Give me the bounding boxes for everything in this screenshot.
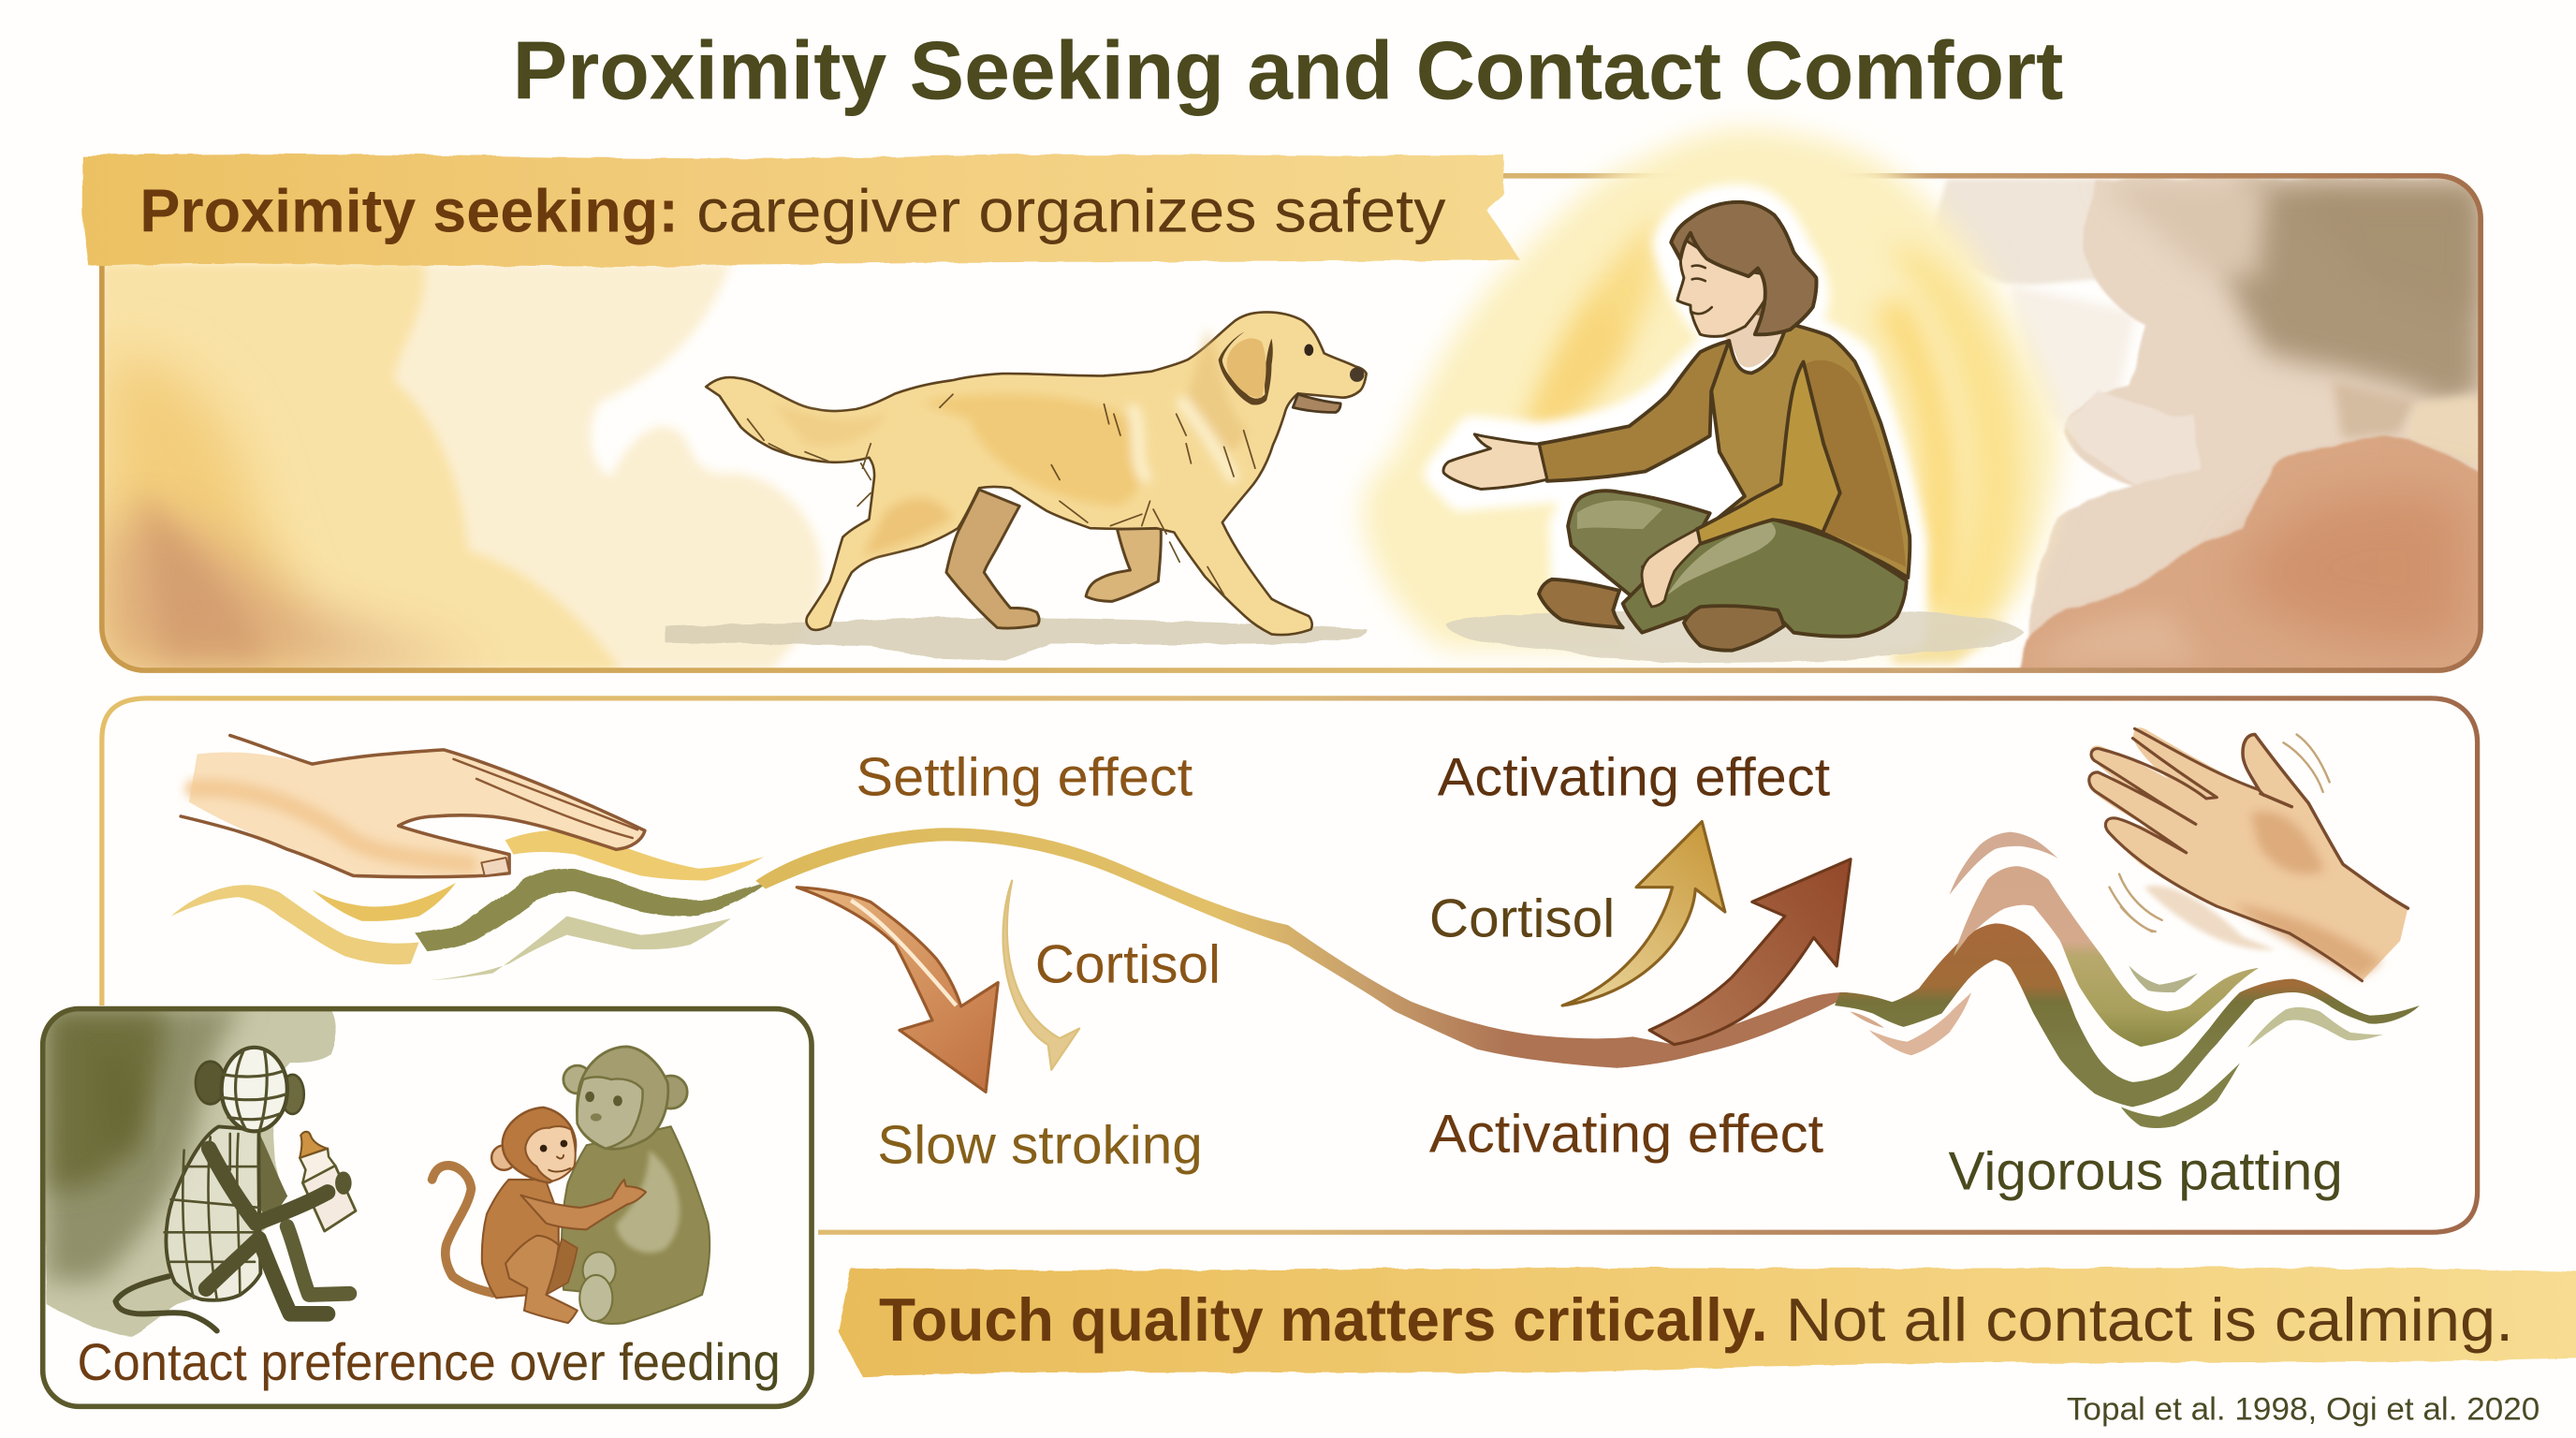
top banner label [139,176,1446,244]
bottom banner [838,1268,2576,1377]
inset caption: Contact preference over feeding [78,1333,781,1391]
label: cortisol down: Cortisol [1035,935,1221,995]
caregiver near sleeve [1697,361,1840,544]
infant far leg [546,1239,578,1295]
dog illustration [706,312,1367,635]
cloth monkey body [562,1126,710,1324]
effect labels [856,747,2343,1202]
caregiver extended hand [1443,434,1547,489]
wire monkey far body arm [256,1134,287,1224]
wire monkey near limbs [206,1149,328,1313]
label: activating effect upper: Activating effect [1438,747,1830,807]
cloth monkey eyes and nose [585,1092,594,1102]
caregiver facial features [1692,266,1712,314]
banner background [838,1268,2576,1377]
panel: contact preference inset [39,1005,812,1406]
wire monkey grip hand [335,1171,352,1195]
wire body mesh [165,1134,259,1299]
caregiver resting hand [1642,529,1700,607]
title: Proximity Seeking and Contact Comfort [513,24,2063,116]
infant near leg [505,1236,578,1323]
decrease arrow [797,888,998,1092]
infant features [540,1145,547,1152]
motion lines [2110,734,2330,932]
panel: proximity seeking scene [82,128,2484,674]
panel frame [102,698,2478,1232]
flowing touch ribbon [755,828,1699,1068]
label: slow stroking: Slow stroking [877,1116,1203,1176]
hand thumb outline [2243,734,2408,908]
wire monkey with bottle [115,1048,356,1331]
dog mouth [1293,394,1340,413]
hand outlines [2089,728,2362,981]
calming ripple bands [171,830,781,980]
ribbon to patting connector [1617,992,1895,1068]
caregiver hair [1671,202,1816,334]
panel: touch quality comparison [102,698,2478,1232]
source citation: Topal et al. 1998, Ogi et al. 2020 [2067,1391,2539,1427]
dog fur strokes [748,394,1255,594]
label: settling effect: Settling effect [856,747,1193,807]
dog far hind leg [946,490,1039,628]
caregiver hair fringe [1671,202,1816,334]
wire monkey ears [196,1062,225,1104]
infant arm [520,1180,646,1229]
dog eye and nose [1304,345,1313,356]
dog ear [1219,331,1273,405]
panel frame [102,176,2481,670]
wire monkey head [222,1048,287,1131]
banner message [879,1285,2513,1354]
wire monkey far leg [287,1226,349,1295]
cloth monkey legs [583,1252,616,1288]
patting hand [2088,727,2408,981]
vigorous patting bands [1835,832,2420,1128]
cortisol increase arrow [1562,822,1725,1005]
dog raised far foreleg [1086,528,1161,601]
caregiver sweater shading [1796,360,1906,566]
caregiver far leg [1568,491,1710,608]
hand shape [2088,727,2408,981]
caregiver face [1677,240,1767,336]
right watercolor wash [1932,179,2484,674]
inset wash [39,1005,336,1336]
activating effect arrow [1649,859,1851,1045]
caregiver sweater [1692,323,1910,578]
top banner label: caregiver organizes safety [696,176,1446,244]
top banner background [82,154,1519,267]
infant head [503,1108,576,1182]
cloth monkey head [577,1047,668,1149]
inset frame [43,1009,812,1406]
caregiver halo [1442,202,1909,633]
caregiver right shoe [1684,606,1784,651]
label: vigorous patting: Vigorous patting [1949,1142,2343,1202]
label: activating effect lower: Activating effect [1429,1104,1823,1164]
ground shadows [666,611,2024,663]
cloth monkey ears [564,1065,592,1093]
infant tail [432,1166,493,1293]
caregiver far leg highlight [1577,501,1662,529]
infant ear [491,1145,516,1170]
dog body and tail [706,312,1367,635]
wire monkey tail [115,1276,217,1331]
slow stroking hand [181,736,645,877]
caregiver illustration [1443,202,1910,651]
top banner label: Proximity seeking: [139,176,679,244]
caregiver near leg highlight [1667,522,1776,594]
infant face [525,1126,576,1181]
wire monkey bottle [300,1132,356,1231]
left watercolor wash [102,263,822,670]
caregiver extended arm [1539,341,1729,481]
caregiver near leg [1623,519,1907,637]
cloth monkey with infant [432,1047,710,1324]
label: cortisol up: Cortisol [1429,888,1615,948]
wire head mesh [222,1051,285,1130]
caregiver neck [1721,312,1791,367]
cortisol decrease arrow [1003,881,1079,1070]
cloth monkey pale patches [616,1151,680,1253]
infant body [482,1180,559,1298]
wire monkey body [166,1126,260,1300]
cloth monkey face [578,1077,643,1149]
hand shading [2234,812,2382,977]
glow behind caregiver [1362,128,2060,664]
banner message: Not all contact is calming. [1786,1285,2513,1354]
dog body shading [772,329,1249,555]
banner message: Touch quality matters critically. [879,1285,1767,1354]
dog ear fill [1227,338,1266,398]
caregiver left shoe [1539,580,1623,627]
hand smear [2144,886,2276,950]
